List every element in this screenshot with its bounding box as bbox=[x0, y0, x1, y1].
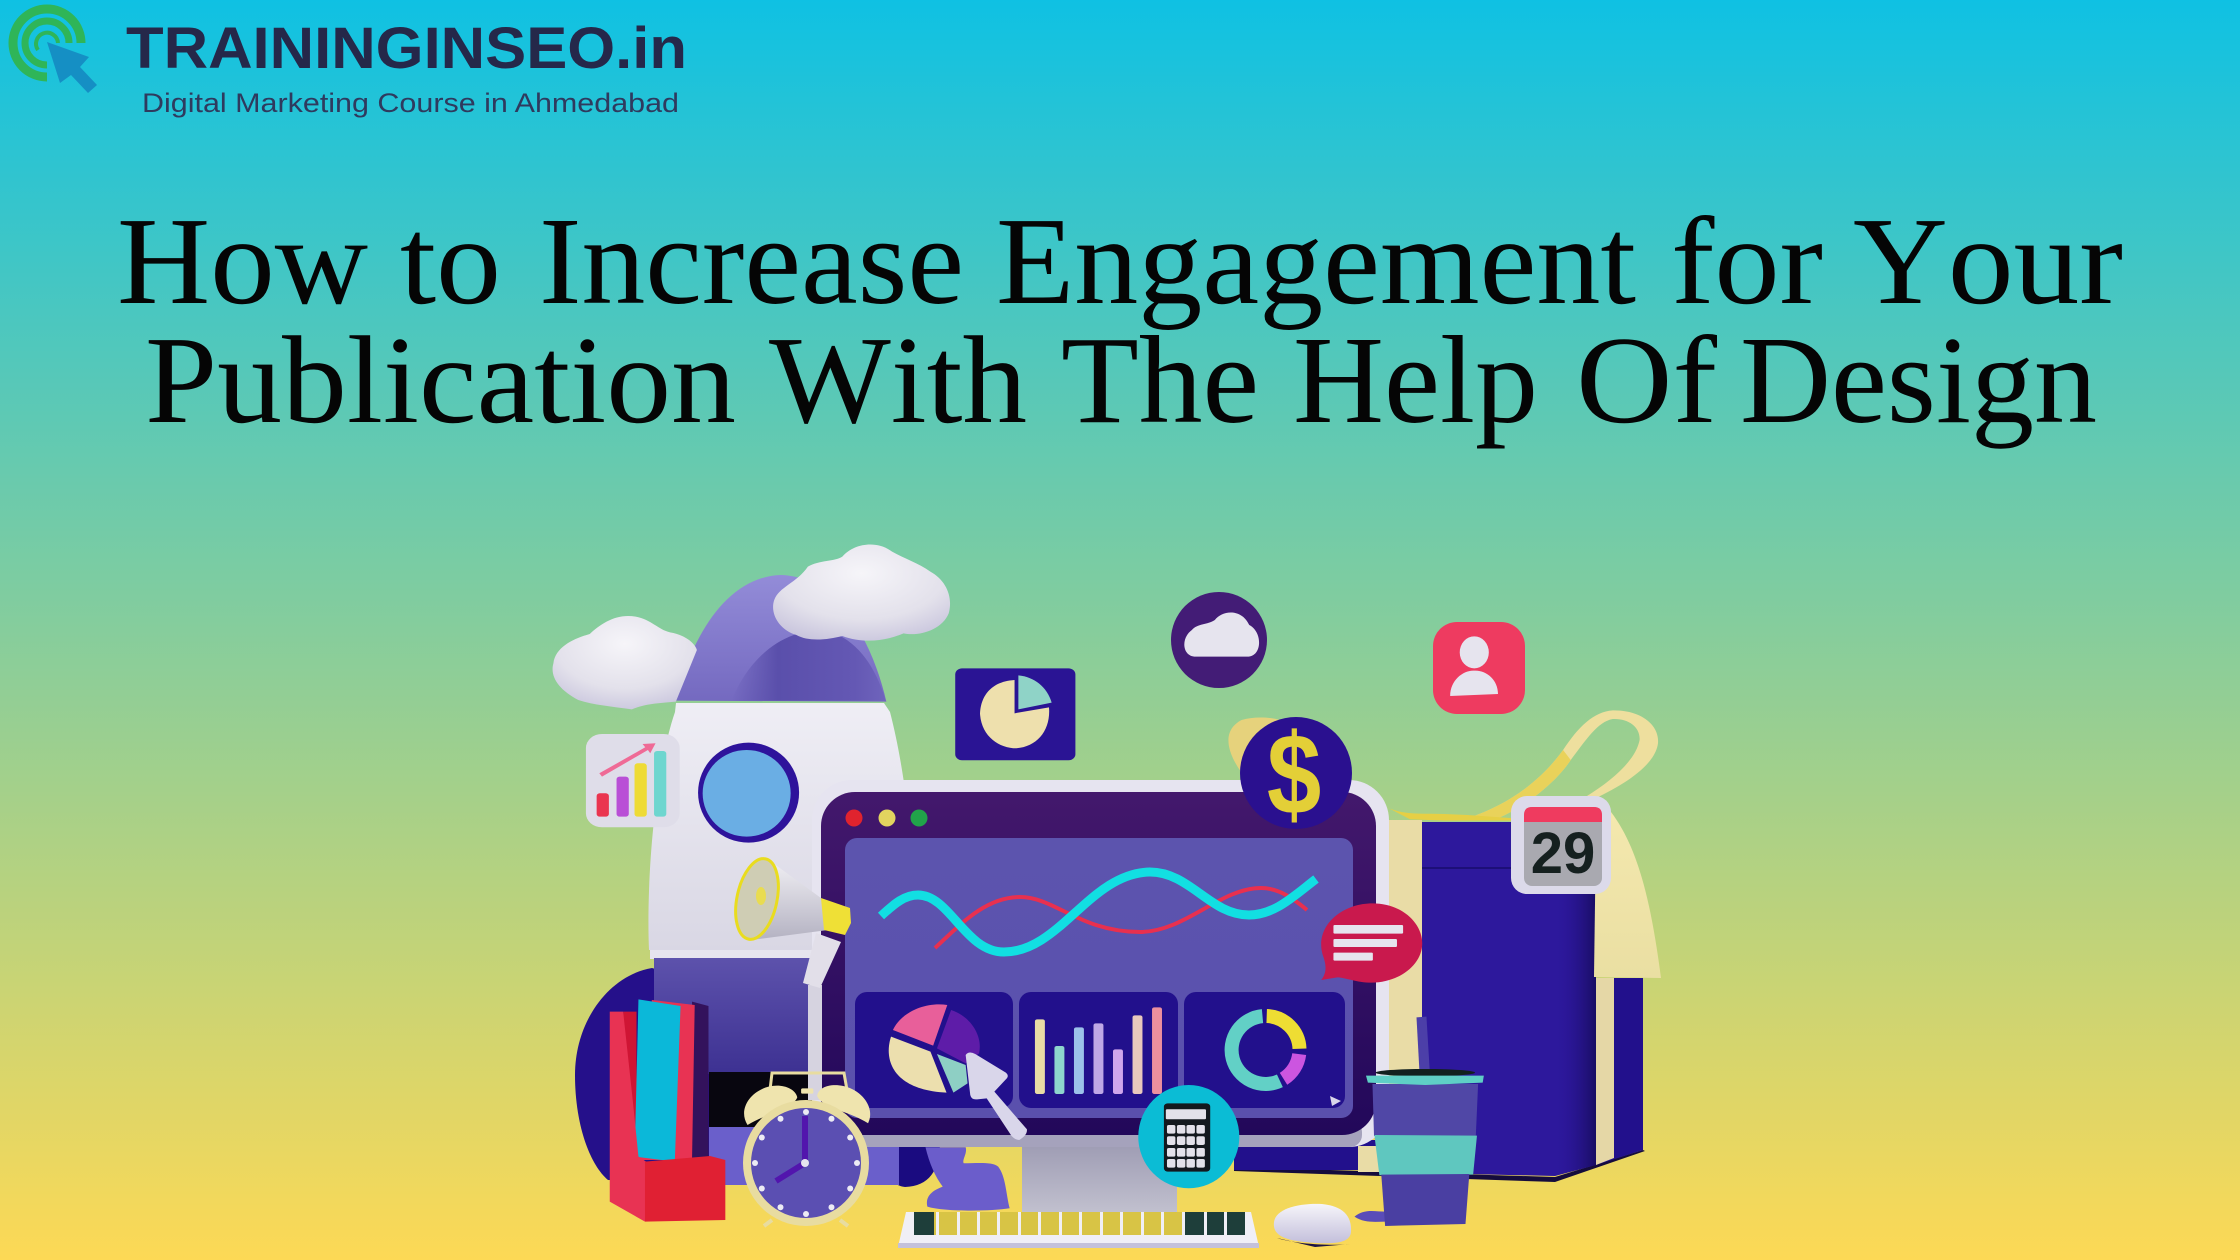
rocket body bbox=[648, 703, 915, 950]
rocket nozzle bbox=[709, 1072, 819, 1128]
monitor bbox=[812, 780, 1389, 1214]
rocket fin right bbox=[886, 1140, 940, 1187]
icon: dollar coin bbox=[1240, 709, 1352, 839]
megaphone body bbox=[751, 858, 828, 940]
title: Publication bbox=[145, 312, 736, 450]
clock bells bbox=[744, 1085, 870, 1125]
megaphone pole bbox=[808, 985, 822, 1100]
panel: donut chart bbox=[1184, 992, 1345, 1108]
title: The bbox=[1061, 312, 1259, 450]
red line chart bbox=[935, 888, 1307, 948]
arrow cursor bbox=[966, 1053, 1027, 1140]
icon: target cursor bbox=[13, 9, 97, 93]
computer mouse bbox=[1274, 1204, 1351, 1247]
megaphone bell bbox=[729, 855, 785, 943]
logo wordmark: TRAININGINSEO.in bbox=[126, 16, 687, 81]
logo tagline: Digital Marketing Course in Ahmedabad bbox=[142, 88, 679, 118]
title: How bbox=[117, 193, 368, 331]
monitor screen bbox=[845, 838, 1353, 1118]
purple blob bbox=[925, 1147, 1010, 1211]
megaphone handle bbox=[803, 933, 841, 988]
icon: calendar bbox=[1511, 796, 1611, 894]
cloud left bbox=[553, 616, 697, 709]
rocket base bbox=[709, 1127, 899, 1185]
icon: pie chart tile bbox=[955, 668, 1075, 760]
rocket nose bbox=[676, 575, 886, 702]
rocket rim bbox=[650, 950, 850, 959]
megaphone bbox=[729, 855, 851, 1100]
box base behind monitor bbox=[1234, 1140, 1384, 1170]
icon: calendar: 29 bbox=[1531, 821, 1595, 886]
title: for bbox=[1671, 193, 1823, 331]
clock hands bbox=[776, 1116, 805, 1181]
rocket lower section bbox=[654, 958, 850, 1074]
title: With bbox=[769, 312, 1027, 450]
title: Help bbox=[1293, 312, 1538, 450]
icon: cloud badge bbox=[1171, 592, 1267, 688]
keyboard bbox=[898, 1212, 1259, 1248]
title: Engagement bbox=[996, 193, 1636, 331]
icon: dollar coin: $ bbox=[1267, 709, 1321, 839]
box right side bbox=[1596, 978, 1643, 1165]
panel: pie chart bbox=[855, 992, 1013, 1108]
drink cup bbox=[1354, 1017, 1484, 1226]
porthole bbox=[698, 743, 799, 843]
monitor bezel bbox=[821, 792, 1376, 1135]
monitor frame bbox=[812, 780, 1389, 1147]
clock dots bbox=[752, 1109, 860, 1217]
title: to bbox=[400, 193, 501, 331]
ribbon loops bbox=[1228, 710, 1658, 821]
box right strap bbox=[1594, 812, 1661, 978]
title: Of bbox=[1576, 312, 1717, 450]
clock feet bbox=[764, 1220, 848, 1226]
title: Increase bbox=[539, 193, 964, 331]
clouds bbox=[553, 545, 950, 709]
rocket fin left bbox=[575, 968, 760, 1185]
monitor stand bbox=[1022, 1140, 1177, 1214]
title: Design bbox=[1740, 312, 2097, 450]
icon: speech bubble bbox=[1321, 903, 1422, 983]
gift box bbox=[1228, 710, 1661, 1182]
illustration bbox=[553, 545, 1661, 1248]
panel: bar chart bbox=[1019, 992, 1178, 1108]
box floor shadow bbox=[1234, 1150, 1645, 1182]
icon: user tile bbox=[1433, 622, 1525, 714]
clock handle bbox=[770, 1073, 847, 1090]
alarm clock bbox=[743, 1073, 870, 1226]
icon: chart tile bbox=[586, 734, 680, 827]
calculator badge bbox=[1138, 1085, 1239, 1188]
rocket bbox=[575, 575, 940, 1187]
logo bbox=[13, 9, 687, 118]
book holder bbox=[610, 999, 725, 1222]
cloud right bbox=[773, 545, 950, 641]
cyan line chart bbox=[881, 872, 1316, 952]
box left ribbon strip bbox=[1358, 820, 1422, 1172]
box front bbox=[1422, 822, 1596, 1176]
clock face bbox=[743, 1100, 869, 1226]
title: Your bbox=[1853, 193, 2123, 331]
window buttons bbox=[846, 810, 928, 826]
title bbox=[117, 193, 2123, 450]
